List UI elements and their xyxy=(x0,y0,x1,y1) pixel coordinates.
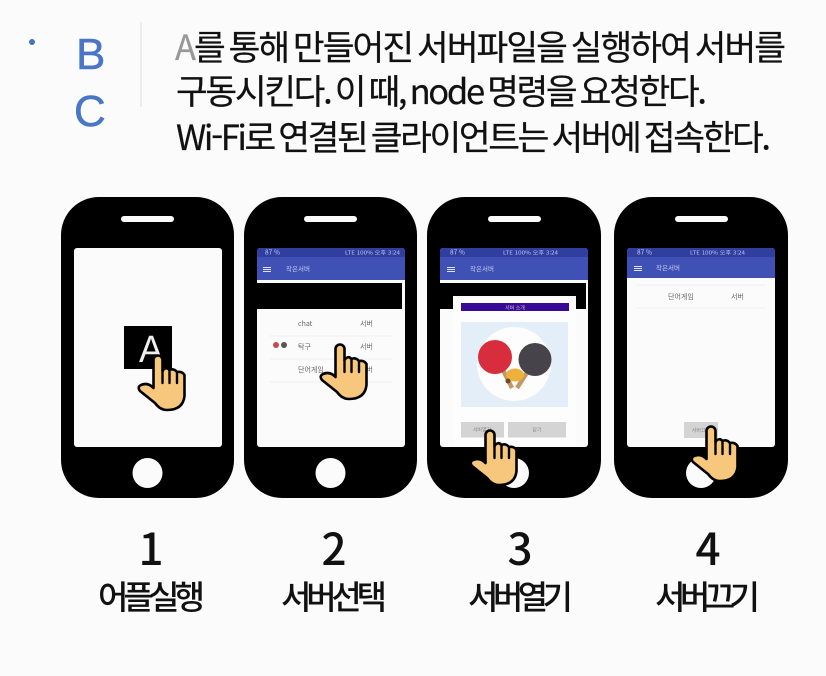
app bar xyxy=(257,246,405,280)
app icon A xyxy=(124,326,172,371)
step 3 label: 서버열기 xyxy=(468,571,573,619)
step 3 label: 3 xyxy=(507,514,533,578)
server list: 서버 xyxy=(360,319,373,329)
server list: 단어게임 xyxy=(298,365,324,375)
step 1 label: 어플실행 xyxy=(98,571,205,619)
step 3 label xyxy=(468,514,573,619)
step 4 label: 서버끄기 xyxy=(655,571,760,619)
step 2 label: 2 xyxy=(321,514,347,578)
app bar: LTE 100% 오후 3:24 xyxy=(345,250,400,256)
close server button: 서버끄기 xyxy=(692,427,710,434)
server row xyxy=(637,285,765,308)
phone 2: select server xyxy=(244,197,417,498)
heading letters B and C: C xyxy=(74,87,106,136)
dialog xyxy=(453,296,576,447)
dialog buttons xyxy=(461,422,566,438)
app bar: 87 % xyxy=(637,246,652,256)
app bar: 작은서버 xyxy=(656,262,680,272)
app bar: LTE 100% 오후 3:24 xyxy=(503,250,558,256)
server row: 단어게임 xyxy=(668,292,694,302)
dialog buttons: 서버열기 xyxy=(473,426,491,434)
phone 3: open server xyxy=(427,197,601,498)
heading letters B and C: B xyxy=(76,30,105,79)
description text: Wi-Fi로 연결된 클라이언트는 서버에 접속한다. xyxy=(176,110,771,160)
icon: tapping hand xyxy=(471,430,516,485)
close server button xyxy=(684,422,718,438)
step 4 label xyxy=(655,514,760,619)
server list: 서버 xyxy=(360,365,373,375)
app bar: 87 % xyxy=(450,246,465,256)
black band xyxy=(257,283,402,309)
server list: 서버 xyxy=(360,342,373,352)
black band xyxy=(440,283,586,309)
icon: tapping hand xyxy=(139,356,184,410)
server list: chat xyxy=(298,319,313,329)
app bar xyxy=(440,246,588,280)
step 4 label: 4 xyxy=(695,514,721,578)
step 2 label: 서버선택 xyxy=(281,571,387,619)
table tennis image xyxy=(461,322,568,407)
app bar: 작은서버 xyxy=(470,263,494,273)
description text xyxy=(175,20,786,160)
app bar xyxy=(627,246,775,278)
description text: 구동시킨다. 이 때, node 명령을 요청한다. xyxy=(176,64,707,114)
dialog: 서버 소개 xyxy=(505,304,525,312)
app bar: 87 % xyxy=(265,246,280,256)
dialog buttons: 닫기 xyxy=(532,426,542,434)
divider xyxy=(140,22,142,107)
bullet xyxy=(29,39,35,45)
app bar: 작은서버 xyxy=(286,263,310,273)
phone 1: run app xyxy=(61,197,234,498)
phone 4: close server xyxy=(614,197,788,498)
server list: 탁구 xyxy=(298,342,311,352)
step 1 label: 1 xyxy=(138,514,164,578)
description text: A를 통해 만들어진 서버파일을 실행하여 서버를 xyxy=(175,20,786,70)
heading letters B and C xyxy=(74,30,106,136)
icon: tapping hand xyxy=(321,344,366,399)
app bar: LTE 100% 오후 3:24 xyxy=(690,250,745,256)
server row: 서버 xyxy=(731,292,744,302)
server list xyxy=(270,319,392,382)
step 2 label xyxy=(281,514,387,619)
step 1 label xyxy=(98,514,205,619)
app icon A: A xyxy=(139,329,164,371)
icon: tapping hand xyxy=(692,426,738,481)
